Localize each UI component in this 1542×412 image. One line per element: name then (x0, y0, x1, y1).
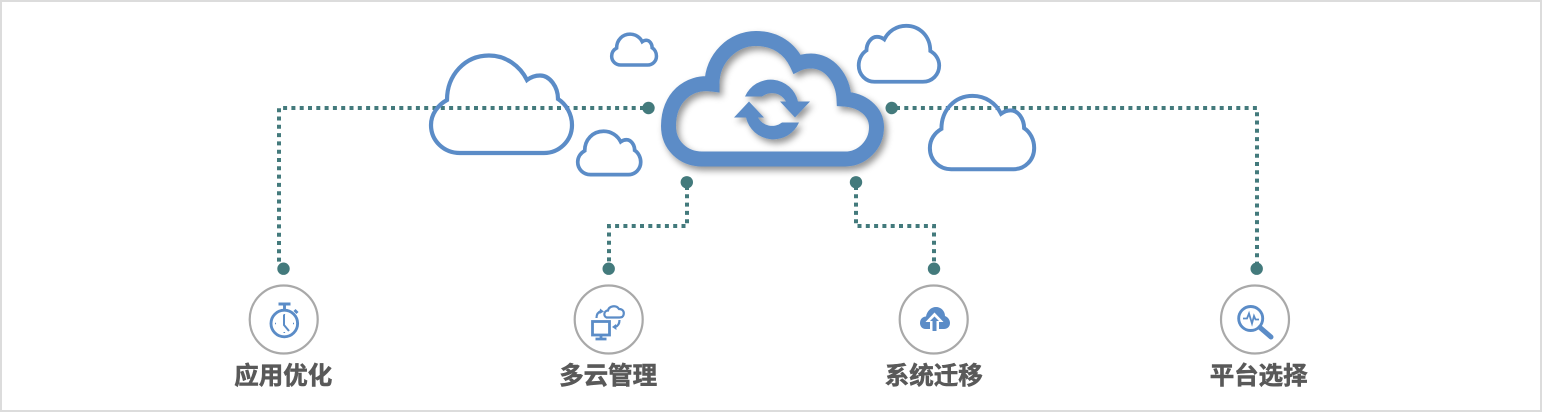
item: 应用优化 (234, 286, 332, 390)
icon: magnifier with pulse (1239, 306, 1271, 337)
cloud: lower right (930, 96, 1034, 169)
icon ring (1221, 286, 1289, 354)
connector: left to 应用优化 (279, 108, 644, 264)
label: 平台选择 (1210, 361, 1308, 390)
connector: to 多云管理 (609, 186, 687, 264)
cloud: small lower (578, 131, 641, 175)
icon: cloud upload (920, 307, 950, 331)
icon ring (250, 286, 318, 354)
cloud: top right mirrored (859, 26, 939, 82)
cloud: large outline left (431, 56, 572, 153)
icon: monitor and cloud (592, 306, 624, 339)
icon ring (900, 286, 968, 354)
item: 系统迁移 (885, 286, 983, 390)
main cloud with sync icon (668, 38, 876, 159)
cloud: small top (612, 34, 656, 65)
label: 多云管理 (559, 362, 657, 390)
label: 应用优化 (234, 361, 332, 390)
item: 多云管理 (559, 286, 657, 390)
connector: right to 平台选择 (896, 108, 1257, 264)
connector: to 系统迁移 (856, 186, 934, 264)
label: 系统迁移 (885, 362, 983, 390)
icon ring (575, 286, 643, 354)
item: 平台选择 (1210, 286, 1308, 390)
icon: sync arrows (734, 80, 810, 139)
connector end dots (277, 102, 1263, 275)
icon: stopwatch (271, 304, 298, 337)
